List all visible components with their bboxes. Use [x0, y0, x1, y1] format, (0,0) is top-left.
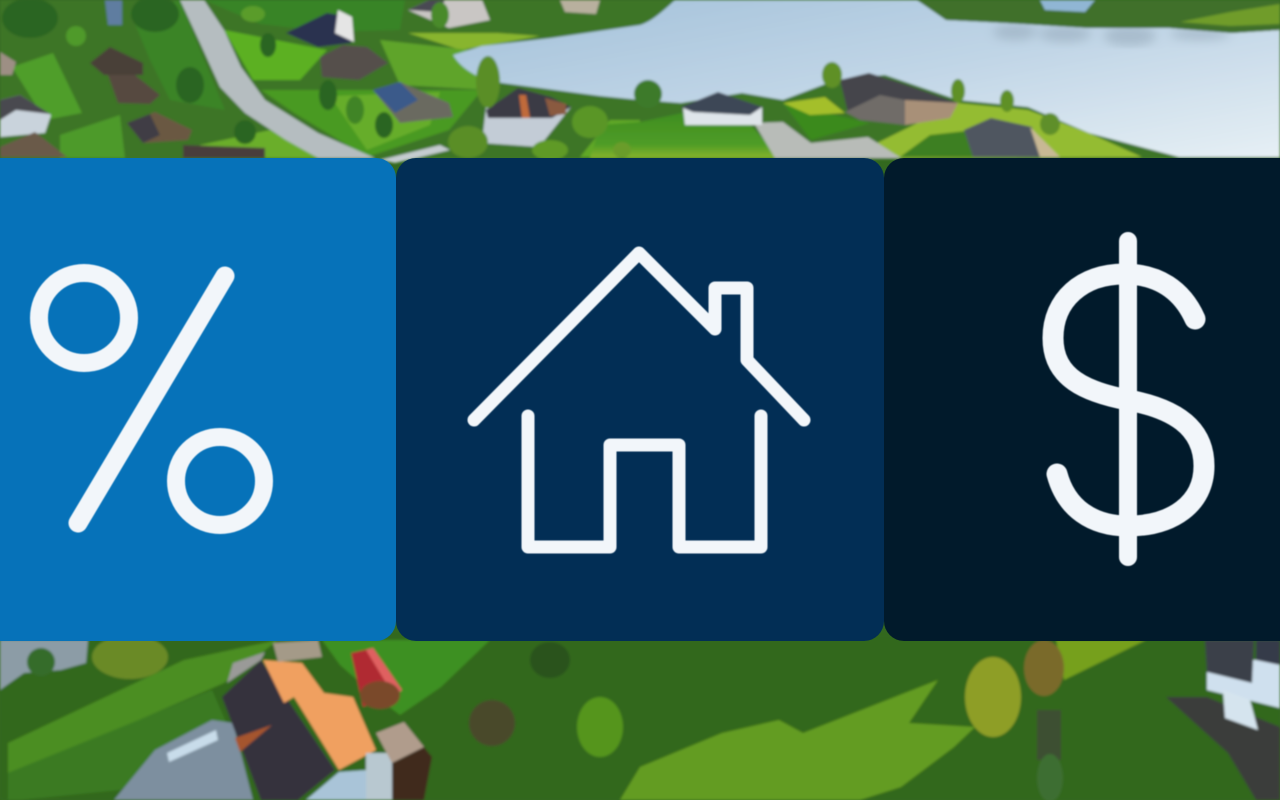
photo: lakeside neighbourhood aerial [0, 0, 1280, 163]
road [180, 0, 375, 158]
driveway [754, 122, 901, 158]
shore reflections [993, 24, 1230, 46]
photo: foreground lawn and house [0, 635, 1280, 800]
far-left houses [90, 47, 143, 75]
near lawns [590, 113, 780, 158]
pond [0, 640, 88, 690]
lawn patches, upper left [12, 53, 82, 120]
icon: house outline [474, 253, 804, 547]
trees [2, 0, 1060, 160]
lakefront house, left [482, 107, 571, 147]
icon: dollar sign [1053, 241, 1204, 557]
right house [1166, 697, 1280, 800]
top middle houses [286, 13, 351, 47]
lawn light bands [8, 640, 278, 773]
panel: dollar [884, 158, 1280, 641]
path strip [380, 145, 450, 163]
driveway [114, 720, 253, 800]
lakefront houses, right [683, 107, 762, 125]
far shore [917, 0, 1280, 33]
white car [167, 730, 218, 762]
red shed [351, 648, 402, 707]
garden circle [469, 700, 515, 746]
icon: percent sign [39, 273, 264, 525]
main house [222, 660, 335, 800]
panel: house [396, 158, 884, 641]
trees [27, 648, 55, 676]
panel: percent [0, 158, 396, 641]
lake [453, 0, 1280, 157]
